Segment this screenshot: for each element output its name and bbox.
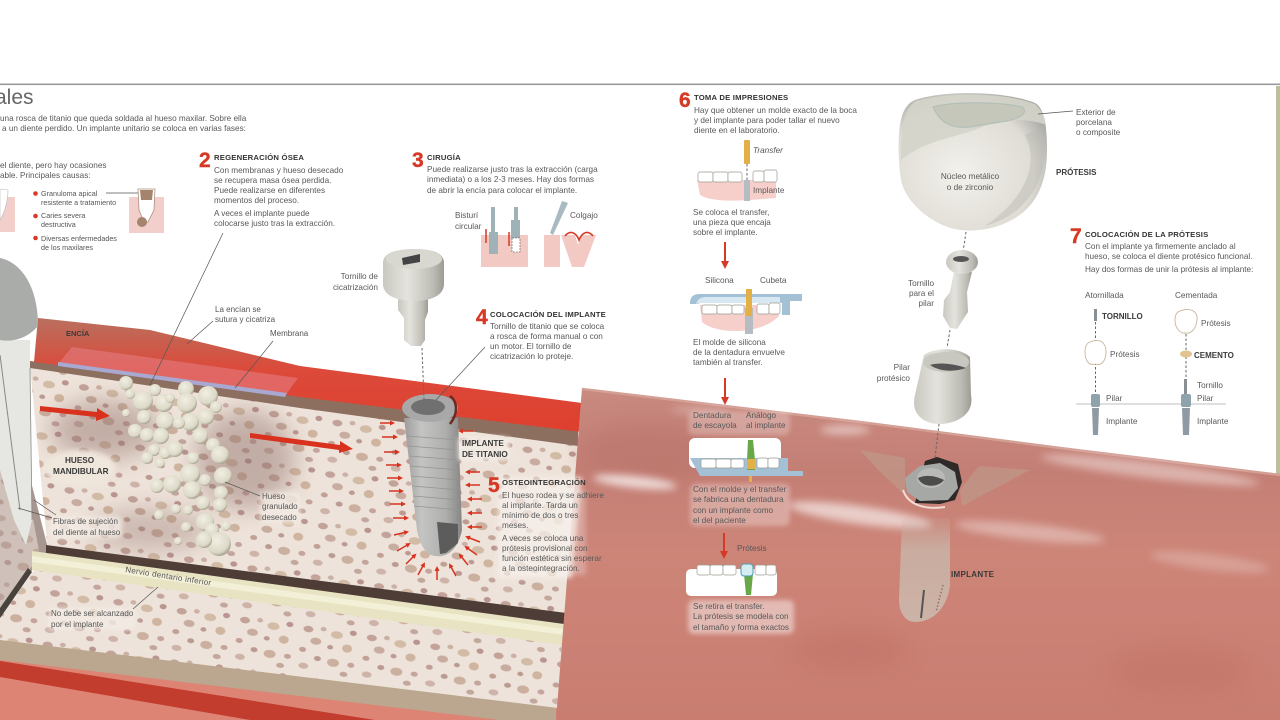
healing screw [333,249,444,400]
arrow down [720,533,728,559]
plaster model diagram: de escayola [693,421,737,430]
3D jaw illustration [0,233,1280,720]
panel: step 6 impressions: el del paciente [693,516,746,525]
crown prosthesis [899,93,1047,231]
panel: step 4 implant placement: COLOCACIÓN DEL IMPLANTE [490,310,606,319]
ghost implant under gum [899,518,950,622]
panel: step 2 bone regeneration: momentos del proceso. [214,196,299,205]
section labels on jaw: sutura y cicatriza [215,315,276,324]
gum lower mottling [790,630,910,670]
intro text: a un diente perdido. Un implante unitario se coloca en varias fases: [2,124,246,133]
panel: step 2 bone regeneration [199,149,344,228]
transfer diagram: Transfer [753,146,783,155]
panel: step 2 bone regeneration: colocarse justo tras la extracción. [214,219,335,228]
gum dark fold [580,420,720,480]
section labels on jaw: Membrana [270,329,309,338]
text halo in bone [48,608,136,630]
text halo on gum [688,411,790,435]
panel: step 5 osseointegration: mínimo de dos o tres [502,511,578,520]
plaster model diagram: Dentadura [693,411,731,420]
causes list: de los maxilares [41,243,93,252]
panel: step 5 osseointegration: al implante. Tarda un [502,501,578,510]
silicone tray diagram: Cubeta [760,276,787,285]
section labels on jaw: La encían se [215,305,261,314]
panel: step 2 bone regeneration: REGENERACIÓN ÓSEA [214,153,304,162]
crown labels [1038,108,1121,177]
gum lower mottling [1110,645,1250,695]
panel: step 4 implant placement: Tornillo de titanio que se coloca [490,322,605,331]
panel: step 5 osseointegration: prótesis provisional con [502,544,588,553]
arrow down [721,242,729,269]
panel: step 5 osseointegration [488,474,604,573]
section labels on jaw: MANDIBULAR [53,467,109,476]
text halo in bone [458,437,510,461]
panel: step 6 impressions: Se retira el transfer. [693,602,764,611]
panel: step 7 fitting the prosthesis: Con el implante ya firmemente anclado al [1085,242,1236,251]
causes list: resistente a tratamiento [41,198,116,207]
screwed variant: Prótesis [1110,350,1140,359]
panel: step 2 bone regeneration: Con membranas y hueso desecado [214,166,344,175]
panel: step 6 impressions: diente en el laboratorio. [694,126,780,135]
osseointegration arrows [380,423,482,580]
mauve fibrous bone under graft [90,508,210,552]
plaster model diagram [689,411,803,482]
nerve [32,551,564,645]
gum crescent highlight under head [903,490,945,508]
causes list: Diversas enfermedades [41,234,117,243]
causes list: destructiva [41,220,76,229]
panel: step 6 impressions: El molde de silicona [693,338,766,347]
panel: step 2 bone regeneration: se recupera masa ósea perdida. [214,176,331,185]
causes list: Granuloma apical [41,189,97,198]
nerve label: Nervio dentario inferior [125,565,212,588]
exploded abutment assembly [860,232,1030,622]
panel: step 3 surgery: CIRUGÍA [427,153,461,162]
tan membrane strips beside head [860,450,1030,506]
panel: step 6 impressions: se fabrica una dentadura [693,495,784,504]
silicone tray diagram: Silicona [705,276,734,285]
section labels on jaw: del diente al hueso [53,528,121,537]
panel: step 7 fitting the prosthesis: COLOCACIÓN DE LA PRÓTESIS [1085,230,1208,239]
panel: step 3 surgery: Colgajo [570,211,598,220]
panel: step 6 impressions: el tamaño y forma exactos [693,623,789,632]
panel: step 6 impressions: 6 [679,89,691,112]
final prosthesis diagram: Prótesis [737,544,767,553]
exploded abutment assembly: IMPLANTE [951,570,995,579]
right page edge strip [1276,86,1280,636]
prosthetic abutment [914,349,972,424]
gum highlights [593,407,1271,577]
silicone tray diagram [690,276,802,334]
panel: step 5 osseointegration: meses. [502,521,528,530]
section labels on jaw: desecado [262,513,297,522]
panel: step 6 impressions: Se coloca el transfer, [693,208,769,217]
panel: step 6 impressions: Hay que obtener un molde exacto de la boca [694,106,857,115]
section labels on jaw: ENCÍA [66,329,90,338]
cemented variant: Implante [1197,417,1229,426]
exploded abutment assembly: pilar [919,299,934,308]
panel: step 4 implant placement: cicatrización lo proteje. [490,352,573,361]
panel: step 3 surgery: de abrir la encía para colocar el implante. [427,186,577,195]
panel: step 6 impressions: Con el molde y el transfer [693,485,787,494]
mauve fibrous bone left of graft [50,400,160,460]
final prosthesis diagram [686,544,777,596]
panel: step 5 osseointegration: A veces se coloca una [502,534,584,543]
text halo in bone [260,492,300,523]
panel: upper spongy bone [30,366,578,622]
exploded abutment assembly: Pilar [894,363,910,372]
implant head in gum [905,457,962,504]
panel: step 7 fitting the prosthesis: Hay dos formas de unir la prótesis al implante: [1085,265,1253,274]
panel: step 6 impressions: y del implante para poder tallar el nuevo [694,116,840,125]
panel: step 3 surgery: Puede realizarse justo tras la extracción (carga [427,165,598,174]
section labels on jaw: IMPLANTE [462,439,504,448]
plaster model diagram: Análogo [746,411,776,420]
crown prosthesis: Núcleo metálico [941,172,999,181]
panel: lower spongy bone [0,570,562,708]
dark trough above nerve [46,545,574,630]
surgery diagrams [481,201,596,267]
panel: step 1 causes: able. Principales causas: [0,171,91,180]
transfer diagram: Implante [753,186,785,195]
panel: step 3 surgery [412,149,598,267]
causes list [33,189,138,252]
tooth on the left [0,258,38,618]
screwed variant: Pilar [1106,394,1123,403]
right gum surface [556,388,1280,720]
causes list: Caries severa [41,211,85,220]
red lower band [0,661,375,720]
bottom gum base [0,600,560,720]
panel: step 1 causes: el diente, pero hay ocasiones [0,161,107,170]
pale label area in bone [44,450,116,486]
panel: step 1 causes [0,161,164,252]
panel: step 3 surgery: circular [455,222,482,231]
panel: step 7 fitting the prosthesis: Atornillada [1085,291,1124,300]
panel: step 6 impressions: de la dentadura envuelve [693,348,785,357]
healing screw: cicatrización [333,283,378,292]
panel: step 2 bone regeneration: A veces el implante puede [214,209,310,218]
panel: step 2 bone regeneration: 2 [199,149,211,172]
panel: step 6 impressions: TOMA DE IMPRESIONES [694,93,788,102]
arrow down [721,378,729,405]
text halo over section 5 [556,490,586,575]
abutment screw [943,250,978,329]
panel: step 5 osseointegration: OSTEOINTEGRACIÓN [502,478,586,487]
crown labels: Exterior de [1076,108,1116,117]
section labels on jaw: por el implante [51,620,104,629]
gum ridge edge [582,389,1280,475]
section labels on jaw: DE TITANIO [462,450,508,459]
top rule [0,84,1280,85]
membrane [58,347,298,397]
left textured bone [0,470,50,620]
text panel for step 5 [498,477,582,578]
panel: step 4 implant placement [436,306,606,400]
screwed variant: TORNILLO [1102,312,1143,321]
cemented variant: Prótesis [1201,319,1231,328]
section labels on jaw: No debe ser alcanzado [51,609,133,618]
panel: step 7 fitting the prosthesis: hueso, se coloca el diente protésico funcional. [1085,252,1252,261]
bone growth arrows [40,406,353,453]
section labels on jaw: Fibras de sujeción [53,517,118,526]
text halo on gum [690,484,790,526]
panel: step 4 implant placement: 4 [476,306,488,329]
text halo on gum [688,600,794,634]
crown prosthesis: o de zirconio [947,183,994,192]
section labels on jaw: Hueso [262,492,285,501]
section labels on jaw: HUESO [65,456,95,465]
exploded abutment assembly: Tornillo [908,279,934,288]
crown labels: o composite [1076,128,1121,137]
screwed variant [1085,309,1143,435]
panel: step 5 osseointegration: a la osteointegración. [502,564,580,573]
exploded abutment assembly: para el [909,289,934,298]
cemented variant: Pilar [1197,394,1214,403]
panel: step 6 impressions: una pieza que encaja [693,218,771,227]
healing screw: Tornillo de [341,272,378,281]
cemented variant: CEMENTO [1194,351,1234,360]
bone granules [119,376,232,556]
red gum section [34,318,582,432]
cemented variant: Tornillo [1197,381,1223,390]
left tooth icon [0,189,15,232]
panel: step 6 impressions: La prótesis se modela con [693,612,789,621]
panel: step 6 impressions: sobre el implante. [693,228,758,237]
cemented variant [1175,309,1234,435]
intro text [0,114,247,133]
panel: step 5 osseointegration: función estética sin esperar [502,554,602,563]
left textured bone cells [0,470,40,612]
transfer diagram [697,140,785,201]
crown labels: PRÓTESIS [1056,168,1097,177]
panel: step 5 osseointegration: El hueso rodea y se adhiere [502,491,604,500]
section labels on jaw: granulado [262,502,298,511]
panel: step 3 surgery: 3 [412,149,424,172]
panel: step 6 impressions [679,89,857,632]
panel: step 6 impressions: con un implante como [693,506,774,515]
panel: step 7 fitting the prosthesis: 7 [1070,225,1082,248]
exploded abutment assembly: protésico [877,374,910,383]
panel: step 7 fitting the prosthesis: Cementada [1175,291,1218,300]
tooth with granuloma icon [129,189,164,233]
panel: step 6 impressions: también al transfer. [693,358,763,367]
panel: step 4 implant placement: un motor. El tornillo de [490,342,572,351]
section labels on jaw [18,233,508,629]
panel: step 5 osseointegration: 5 [488,474,500,497]
crown labels: porcelana [1076,118,1112,127]
panel: step 3 surgery: inmediata) o a los 2-3 meses. Hay dos formas [427,175,594,184]
panel: step 4 implant placement: a rosca de forma manual o con [490,332,603,341]
panel: step 7 fitting the prosthesis [1070,225,1253,435]
panel: step 2 bone regeneration: Puede realizarse en diferentes [214,186,325,195]
text halo in bone [50,516,122,538]
dark cortical line above bone [30,361,578,446]
intro text: una rosca de titanio que queda soldada al hueso maxilar. Sobre ella [0,114,247,123]
screwed variant: Implante [1106,417,1138,426]
implant in bone [402,394,462,556]
mauve fibrous bone right of graft [195,410,295,510]
plaster model diagram: al implante [746,421,786,430]
tan bone base band [0,640,556,720]
panel: step 3 surgery: Bisturí [455,211,478,220]
